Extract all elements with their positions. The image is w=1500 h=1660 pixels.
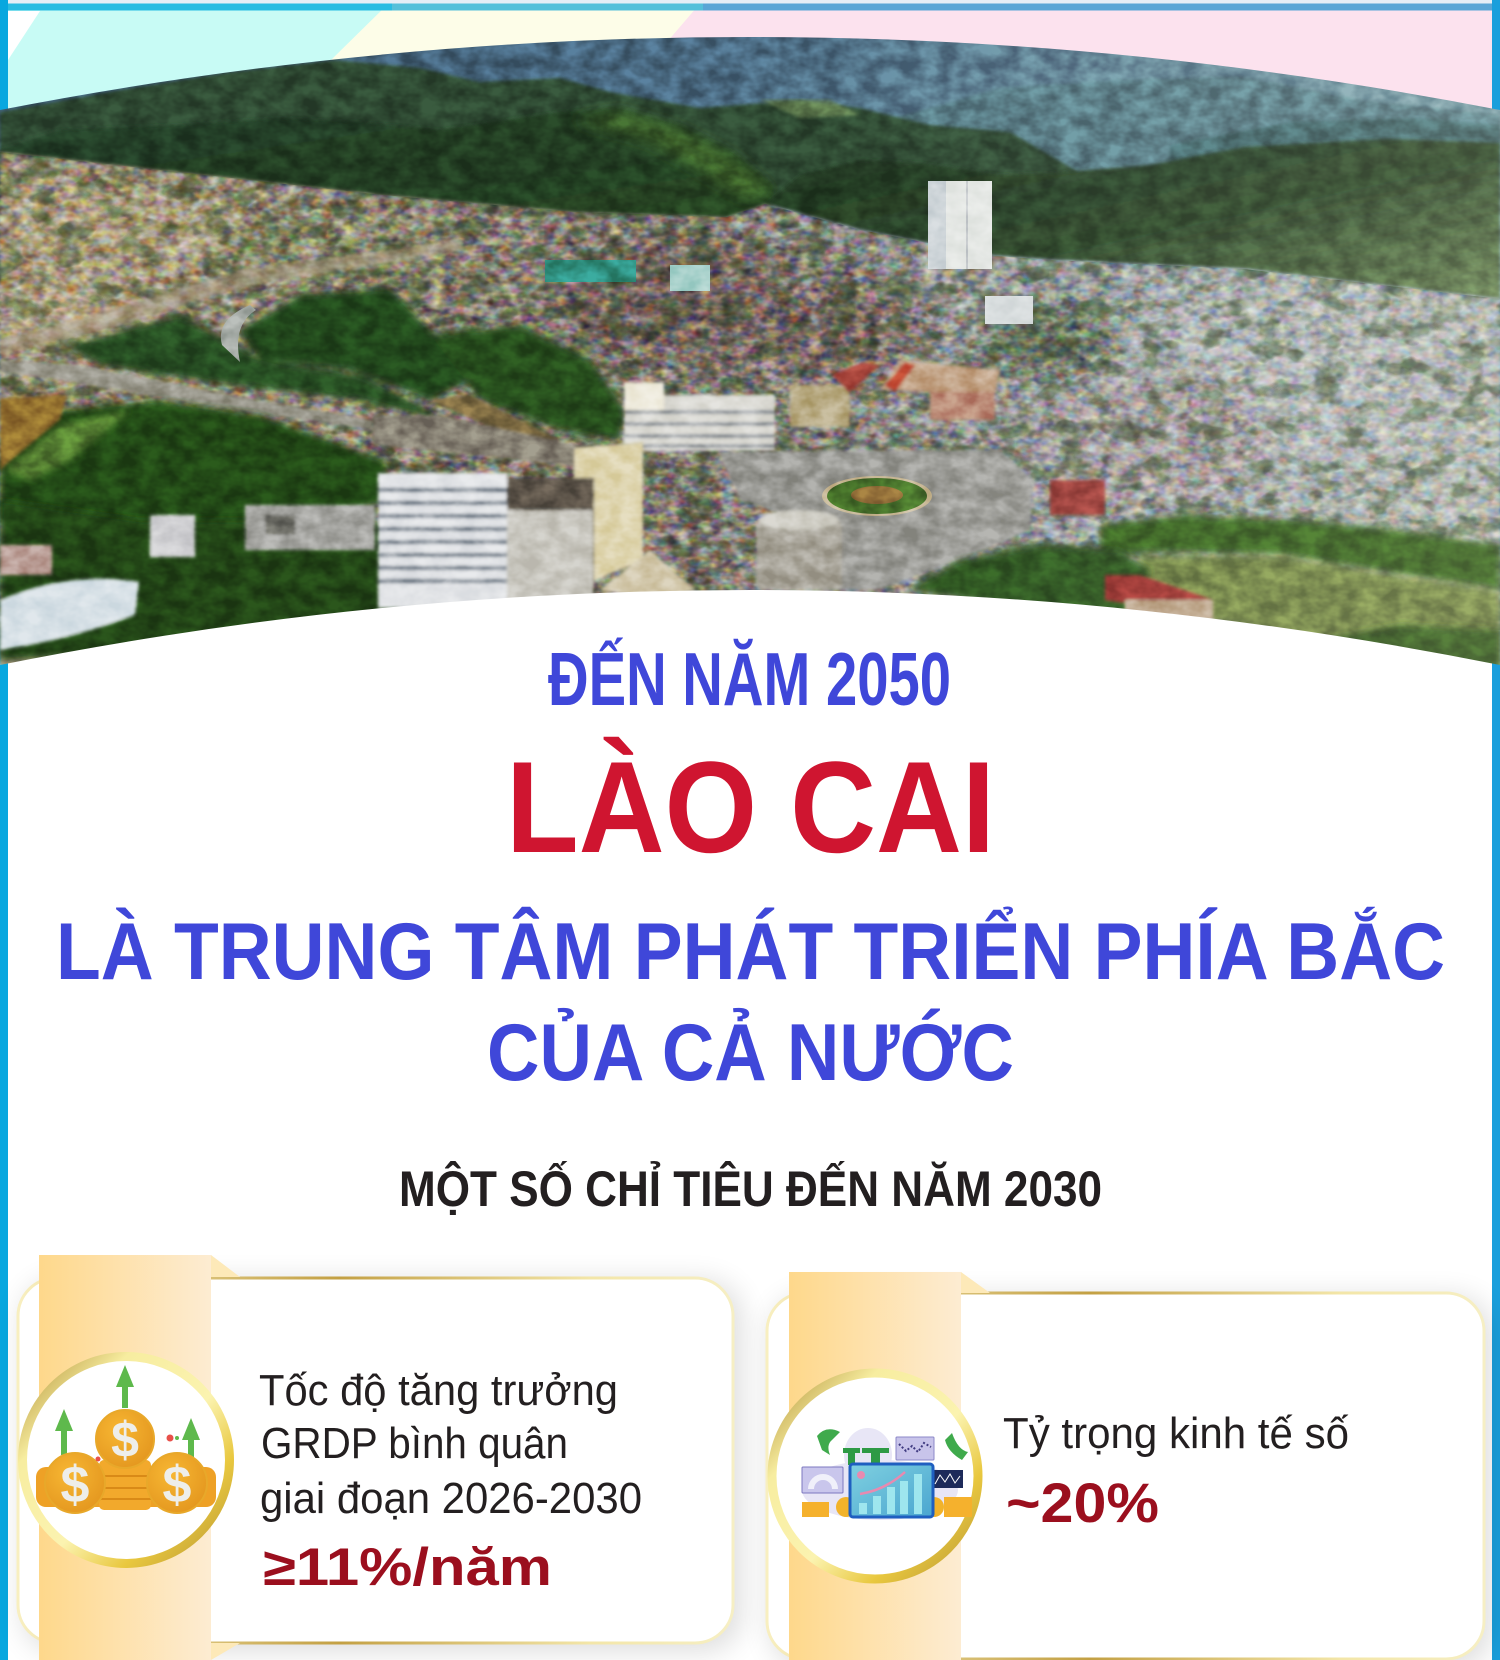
town base <box>0 152 1500 680</box>
icon ring <box>22 1356 230 1564</box>
card shadow <box>770 1296 1492 1660</box>
roundabout <box>822 476 932 516</box>
lit slope on ridge <box>760 100 860 118</box>
town mottled texture <box>0 150 1500 630</box>
icon ring <box>772 1373 978 1579</box>
low lit foreground <box>0 500 400 660</box>
indicator value: ≥11%/năm <box>263 1538 552 1597</box>
central white block <box>624 382 850 451</box>
dome roof <box>0 579 139 650</box>
field lower right <box>1139 555 1500 670</box>
road along river <box>0 360 373 430</box>
card shadow <box>22 1280 742 1652</box>
subheading: một số chỉ tiêu: MỘT SỐ CHỈ TIÊU ĐẾN NĂM 2030 <box>399 1160 1102 1217</box>
indicator label <box>259 1366 642 1523</box>
bridge <box>373 415 600 468</box>
hill far-right trees <box>1320 625 1500 690</box>
far blue mountains <box>0 37 1500 330</box>
icon: gold coins with green arrows: $ <box>61 1456 90 1514</box>
tan slope <box>0 395 67 470</box>
villas <box>0 505 375 575</box>
lit slopes on left hill <box>575 112 772 198</box>
river <box>430 395 560 445</box>
left hill with trees <box>0 400 400 540</box>
right hill <box>765 139 1500 299</box>
mid ridge left <box>0 60 1090 230</box>
teal buildings <box>545 260 1033 324</box>
tall residential tower <box>928 181 992 269</box>
hotel complex <box>378 442 695 608</box>
heading: Lào Cai: LÀO CAI <box>506 734 995 880</box>
hero photo: aerial view of Lao Cai city <box>0 0 1500 690</box>
leaf texture <box>0 30 1500 670</box>
card body <box>767 1293 1484 1659</box>
indicator label: Tỷ trọng kinh tế số <box>1003 1409 1349 1458</box>
heading: đến năm 2050: ĐẾN NĂM 2050 <box>548 637 951 721</box>
trees bottom center right <box>909 545 1150 625</box>
icon: digital economy dashboard <box>802 1428 972 1520</box>
town colour patches <box>0 185 1490 510</box>
tree band lower right <box>1100 515 1500 590</box>
town tree clumps <box>0 150 1500 630</box>
icon: gold coins with green arrows: $ <box>111 1412 139 1468</box>
lit grass <box>5 410 130 480</box>
panel: GRDP growth card <box>18 1255 742 1660</box>
indicator value: ~20% <box>1006 1471 1159 1534</box>
icon: gold coins with green arrows: $ <box>163 1456 192 1514</box>
park and tree rows <box>70 288 625 440</box>
heading line: của cả nước: CỦA CẢ NƯỚC <box>487 1007 1014 1098</box>
indicator label: GRDP bình quân <box>261 1419 568 1468</box>
indicator label: Tốc độ tăng trưởng <box>259 1366 618 1415</box>
round building <box>756 510 842 590</box>
top decorative background <box>0 0 1500 120</box>
plaza and roads <box>718 450 1033 590</box>
road to the left <box>0 240 465 355</box>
curved park road <box>221 305 256 362</box>
sun haze <box>0 30 1500 670</box>
card body <box>18 1278 733 1643</box>
red roof building <box>1105 575 1213 620</box>
icon: gold coins with green arrows <box>36 1365 216 1514</box>
indicator label: giai đoạn 2026-2030 <box>260 1474 642 1523</box>
gold ribbon <box>39 1255 240 1660</box>
panel: digital economy card <box>767 1272 1492 1660</box>
front left hill <box>0 108 775 222</box>
red roofs <box>832 360 1105 515</box>
gold ribbon <box>789 1272 990 1660</box>
